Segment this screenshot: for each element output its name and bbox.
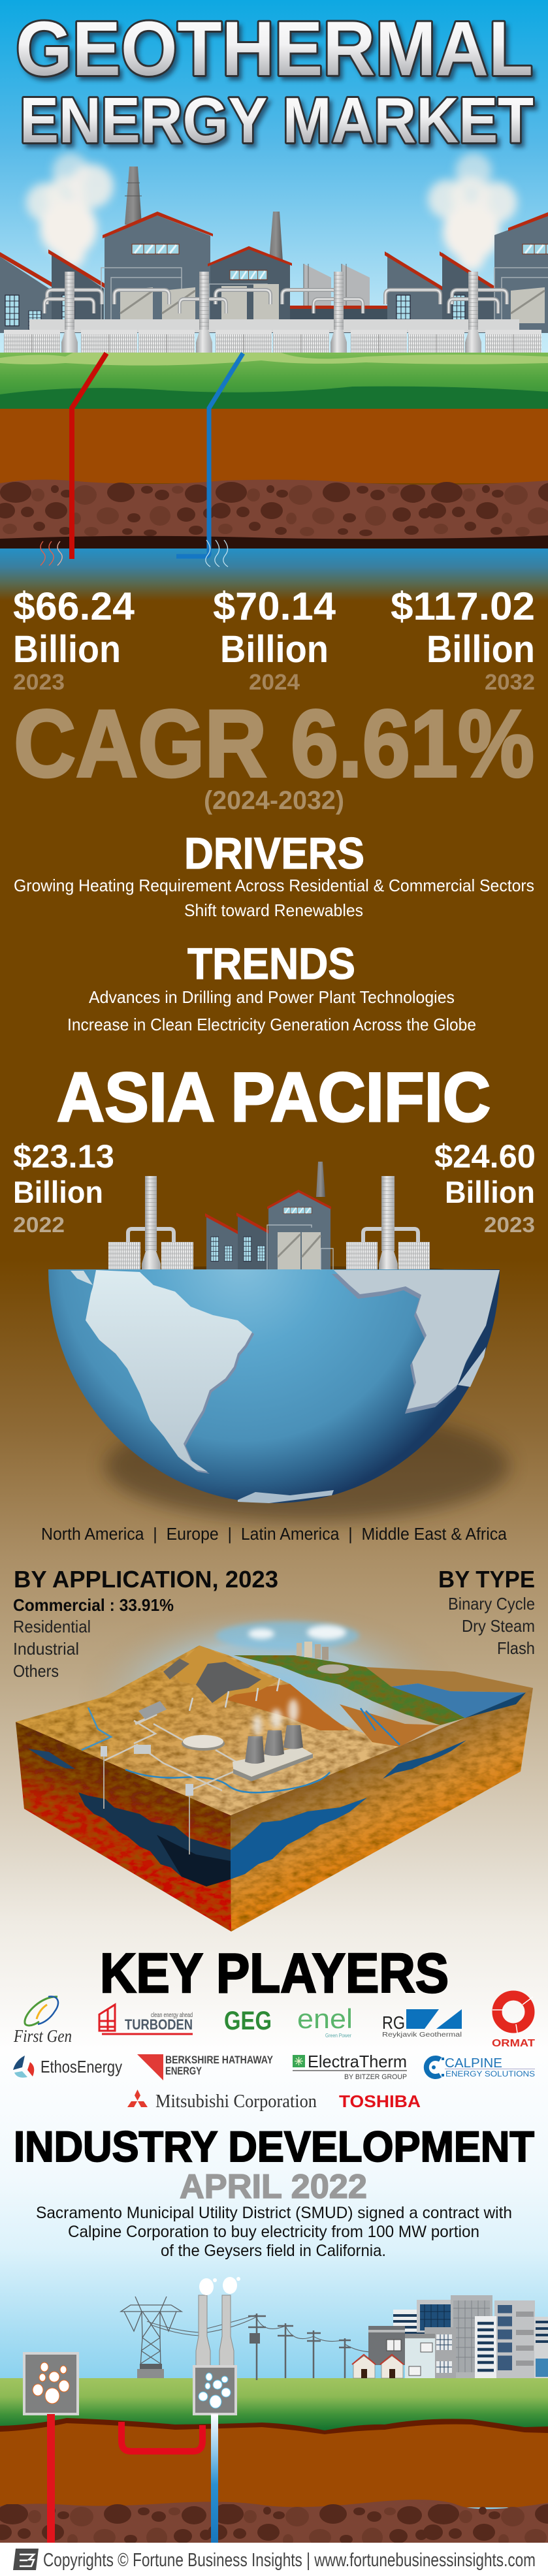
logo: GEG: GEG [224, 2007, 272, 2035]
stat: 2024 market size: $70.14 [213, 584, 336, 628]
factory buildings [0, 167, 548, 333]
icon: silver stack right [346, 1176, 430, 1269]
block right face [231, 1688, 533, 1932]
stat: 2032 market size: $117.02 [391, 584, 535, 628]
key players heading: KEY PLAYERS [100, 1943, 449, 2005]
logo: Reykjavik Geothermal [382, 2009, 462, 2039]
development description: Calpine Corporation to buy electricity from 100 MW portion [68, 2223, 479, 2241]
sky [0, 0, 548, 356]
drivers: DRIVERS [184, 829, 364, 878]
stat: 2024 market size: 2024 [249, 670, 300, 695]
globe with plant [48, 1162, 509, 1521]
logo: EthosEnergy [13, 2056, 122, 2078]
logo: Reykjavik Geothermal: RG [382, 2012, 405, 2033]
red hot-water well pipe [72, 353, 106, 559]
logo: Enel Green Power: Green Power [325, 2033, 351, 2039]
logo: Calpine: CALPINE [445, 2056, 502, 2071]
by application: Others [13, 1661, 59, 1681]
cold well pipe [211, 2414, 218, 2543]
drivers: Growing Heating Requirement Across Residential & Commercial Sectors [14, 876, 534, 895]
heat arrows [40, 540, 228, 567]
by application: Residential [13, 1617, 91, 1636]
trends: TRENDS [187, 939, 355, 989]
logo: Ormat: ORMAT [492, 2038, 535, 2049]
development description: of the Geysers field in California. [161, 2242, 386, 2260]
rivers and pipes [82, 1708, 330, 1792]
logo: Turboden: TURBODEN [125, 2016, 193, 2033]
trends: Advances in Drilling and Power Plant Technologies [89, 987, 455, 1007]
hot well pipe [47, 2414, 55, 2543]
by type: Dry Steam [462, 1616, 535, 1636]
logo: ElectraTherm: BY BITZER GROUP [344, 2073, 407, 2081]
city on the block [297, 1642, 349, 1674]
drivers [14, 829, 534, 920]
logo: Turboden: clean energy ahead [151, 2012, 193, 2019]
development description [36, 2204, 512, 2260]
stat: 2024 market size [213, 584, 336, 695]
trends: Increase in Clean Electricity Generation Across the Globe [67, 1015, 476, 1034]
by type: Flash [497, 1638, 535, 1658]
logo: Berkshire Hathaway Energy: BERKSHIRE HATHAWAY [165, 2054, 274, 2066]
logo: Calpine [427, 2056, 535, 2078]
logo: ElectraTherm [293, 2052, 407, 2081]
other regions list: North America | Europe | Latin America | Middle East & Africa [41, 1525, 508, 1544]
icon: silver stack left [108, 1176, 193, 1269]
stat: 2023 market size: Billion [13, 628, 121, 671]
drivers: Shift toward Renewables [184, 900, 363, 920]
stat: asia pacific 2023 [434, 1138, 536, 1237]
hot well box [24, 2353, 78, 2414]
ground and soil [0, 2378, 548, 2558]
stat: 2023 market size [13, 584, 135, 695]
footer [0, 2543, 548, 2576]
connector U pipe [121, 2422, 202, 2451]
by application: Industrial [13, 1639, 79, 1659]
development description: Sacramento Municipal Utility District (SMUD) signed a contract with [36, 2204, 512, 2222]
buildings [352, 2295, 548, 2378]
bottom scene: power distribution [0, 2277, 548, 2558]
logo: Calpine: ENERGY SOLUTIONS [445, 2069, 535, 2078]
top hero scene: geothermal plant [0, 0, 548, 601]
CAGR: (2024-2032) [204, 786, 344, 815]
logo: Ormat [492, 1996, 535, 2049]
stat: 2023 market size: $66.24 [13, 584, 135, 628]
power plant on the block [101, 1678, 313, 1854]
stat: 2032 market size: 2032 [485, 670, 535, 695]
block left face [16, 1722, 231, 1932]
by application [13, 1566, 278, 1681]
stat: asia pacific 2023: $24.60 [434, 1138, 536, 1175]
twin steam stacks [196, 2277, 240, 2367]
soil layers [0, 409, 548, 601]
stat: 2023 market size: 2023 [13, 670, 65, 695]
stat: asia pacific 2023: 2023 [484, 1213, 535, 1237]
half globe [48, 1269, 500, 1503]
stat: asia pacific 2022: 2022 [13, 1213, 65, 1237]
stat: asia pacific 2022: $23.13 [13, 1138, 114, 1175]
by application: Commercial : 33.91% [13, 1595, 174, 1615]
stat: 2032 market size: Billion [427, 628, 535, 671]
stat: asia pacific 2023: Billion [445, 1175, 535, 1209]
block surface [16, 1646, 533, 1815]
icon: factory on globe [205, 1162, 333, 1270]
geothermal terrain block [16, 1603, 533, 1932]
stat: asia pacific 2022 [13, 1138, 114, 1237]
transmission tower [121, 2297, 182, 2378]
by type: BY TYPE [438, 1566, 535, 1593]
logo: Turboden [99, 2005, 193, 2034]
stat: 2032 market size [391, 584, 535, 695]
logo: First Gen: First Gen [13, 2026, 72, 2046]
underground water caverns [28, 1740, 466, 1886]
asia pacific heading: ASIA PACIFIC [57, 1058, 491, 1136]
title: GEOTHERMAL [16, 6, 533, 92]
cooling units, pipe arches and silver stacks [4, 272, 541, 353]
by type: Binary Cycle [448, 1594, 535, 1614]
power lines and poles [147, 2314, 398, 2380]
logo: EthosEnergy: EthosEnergy [40, 2057, 122, 2076]
logo: First Gen [13, 1997, 72, 2046]
steam clouds [26, 153, 517, 271]
stat: 2024 market size: Billion [220, 628, 329, 671]
continents [71, 1270, 500, 1503]
logo: Mitsubishi Corporation: Mitsubishi Corporation [155, 2091, 317, 2112]
cold well box [194, 2366, 236, 2414]
logo: Reykjavik Geothermal: Reykjavik Geothermal [382, 2031, 462, 2039]
by application: BY APPLICATION, 2023 [14, 1566, 278, 1593]
grass [0, 353, 548, 409]
by type [438, 1566, 535, 1658]
stat: asia pacific 2022: Billion [13, 1175, 103, 1209]
trends [67, 939, 476, 1034]
blue cold-water well pipe [176, 353, 243, 556]
logo: ElectraTherm: ElectraTherm [308, 2052, 407, 2071]
title [16, 6, 537, 160]
logo: Berkshire Hathaway Energy: ENERGY [165, 2065, 202, 2077]
icon: Fortune Business Insights logo [13, 2549, 39, 2570]
logo: Toshiba: TOSHIBA [339, 2091, 421, 2111]
date: APRIL 2022 [180, 2168, 367, 2206]
logo: Berkshire Hathaway Energy [137, 2054, 274, 2080]
logo: Enel Green Power: enel [297, 2003, 353, 2034]
